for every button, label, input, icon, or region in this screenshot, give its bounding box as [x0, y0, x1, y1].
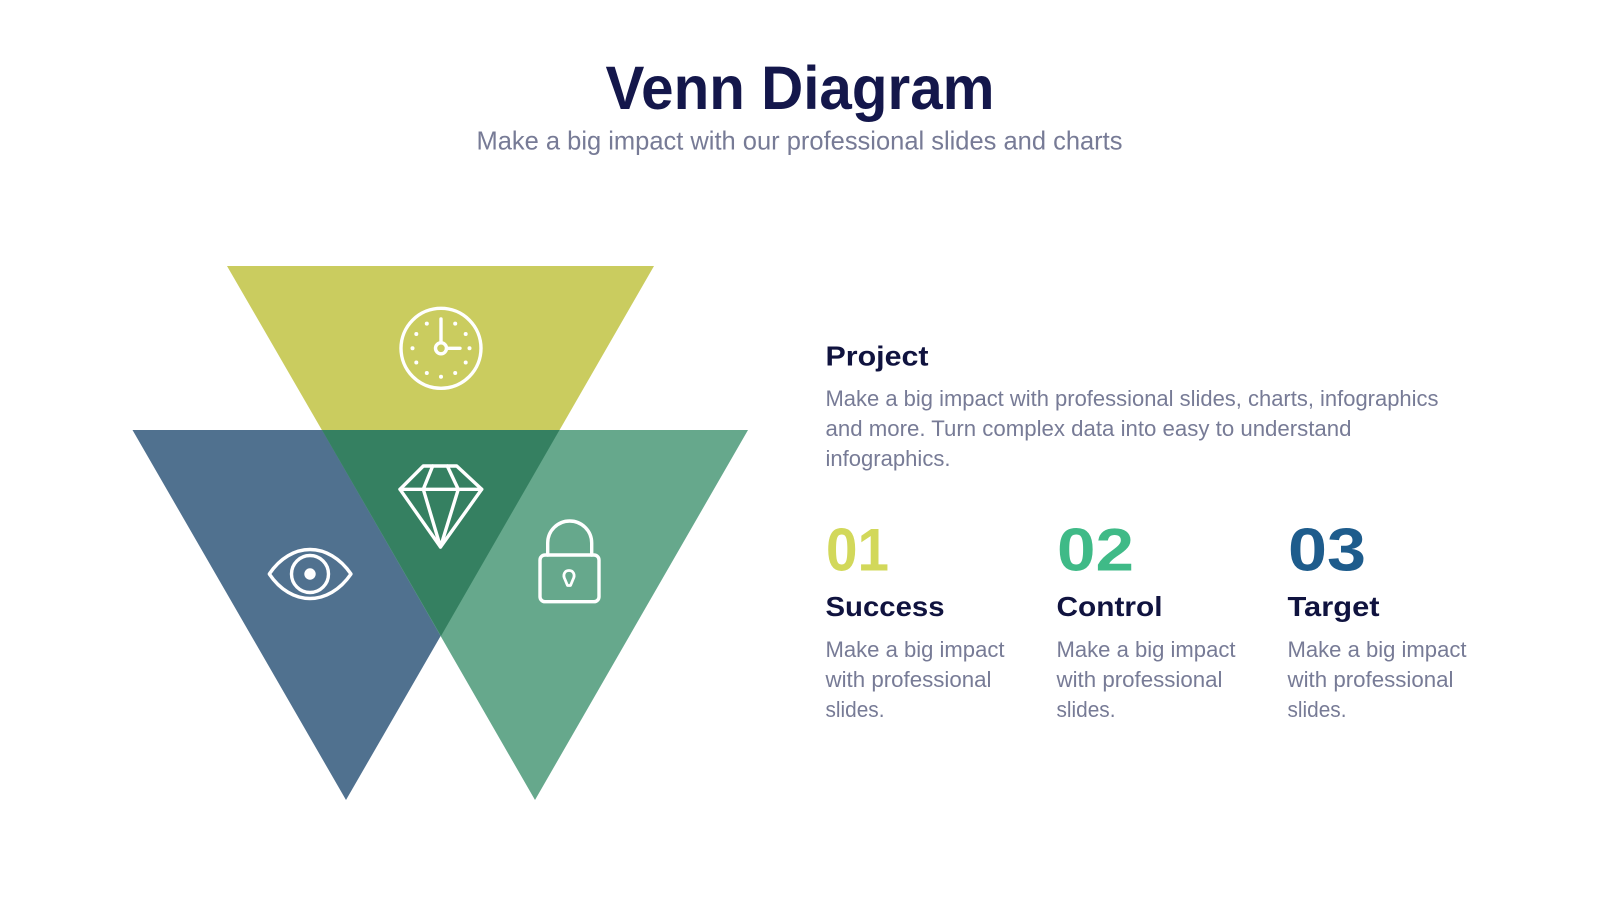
number 03: 03 [1288, 516, 1366, 584]
icon: eye [269, 550, 351, 598]
text block: control body: with professional [1055, 667, 1222, 692]
text block: control body [1055, 637, 1236, 722]
icon: diamond [400, 466, 482, 547]
icon: lock [540, 521, 599, 602]
text block: success body: slides. [826, 697, 884, 722]
text block: success body [824, 637, 1004, 722]
icon: clock [401, 308, 481, 388]
heading: control: Control [1056, 591, 1162, 622]
heading: success: Success [826, 591, 944, 622]
text block: project body: Make a big impact with professional slides, charts, infographics [826, 386, 1438, 411]
heading: target: Target [1288, 591, 1380, 622]
triangle: centre overlap [322, 430, 560, 636]
text block: control body: slides. [1056, 697, 1116, 722]
venn diagram of three triangles [132, 266, 748, 800]
title: Venn Diagram [606, 54, 994, 122]
text block: target body: Make a big impact [1288, 637, 1466, 662]
triangle: left blue [132, 430, 560, 800]
text block: success body: Make a big impact [826, 637, 1004, 662]
number 02: 02 [1057, 516, 1134, 584]
text block: target body [1286, 637, 1466, 722]
header [476, 54, 1122, 156]
panel: project description [826, 340, 1438, 471]
text block: target body: with professional [1286, 667, 1454, 692]
text block: project body: infographics. [826, 446, 950, 471]
number 01: 01 [826, 516, 889, 584]
text block: success body: with professional [824, 667, 992, 692]
text block: control body: Make a big impact [1056, 637, 1236, 662]
heading: project: Project [826, 340, 928, 372]
panel: 01 success [824, 516, 1004, 722]
triangle: top yellow [227, 266, 654, 636]
subtitle: Make a big impact with our professional slides and charts [476, 126, 1122, 156]
panel: 03 target [1286, 516, 1466, 722]
text block: project body: and more. Turn complex data into easy to understand [826, 416, 1352, 441]
text block: project body [826, 386, 1438, 471]
text block: target body: slides. [1288, 697, 1346, 722]
triangle: right green [322, 430, 748, 800]
panel: 02 control [1055, 516, 1236, 722]
